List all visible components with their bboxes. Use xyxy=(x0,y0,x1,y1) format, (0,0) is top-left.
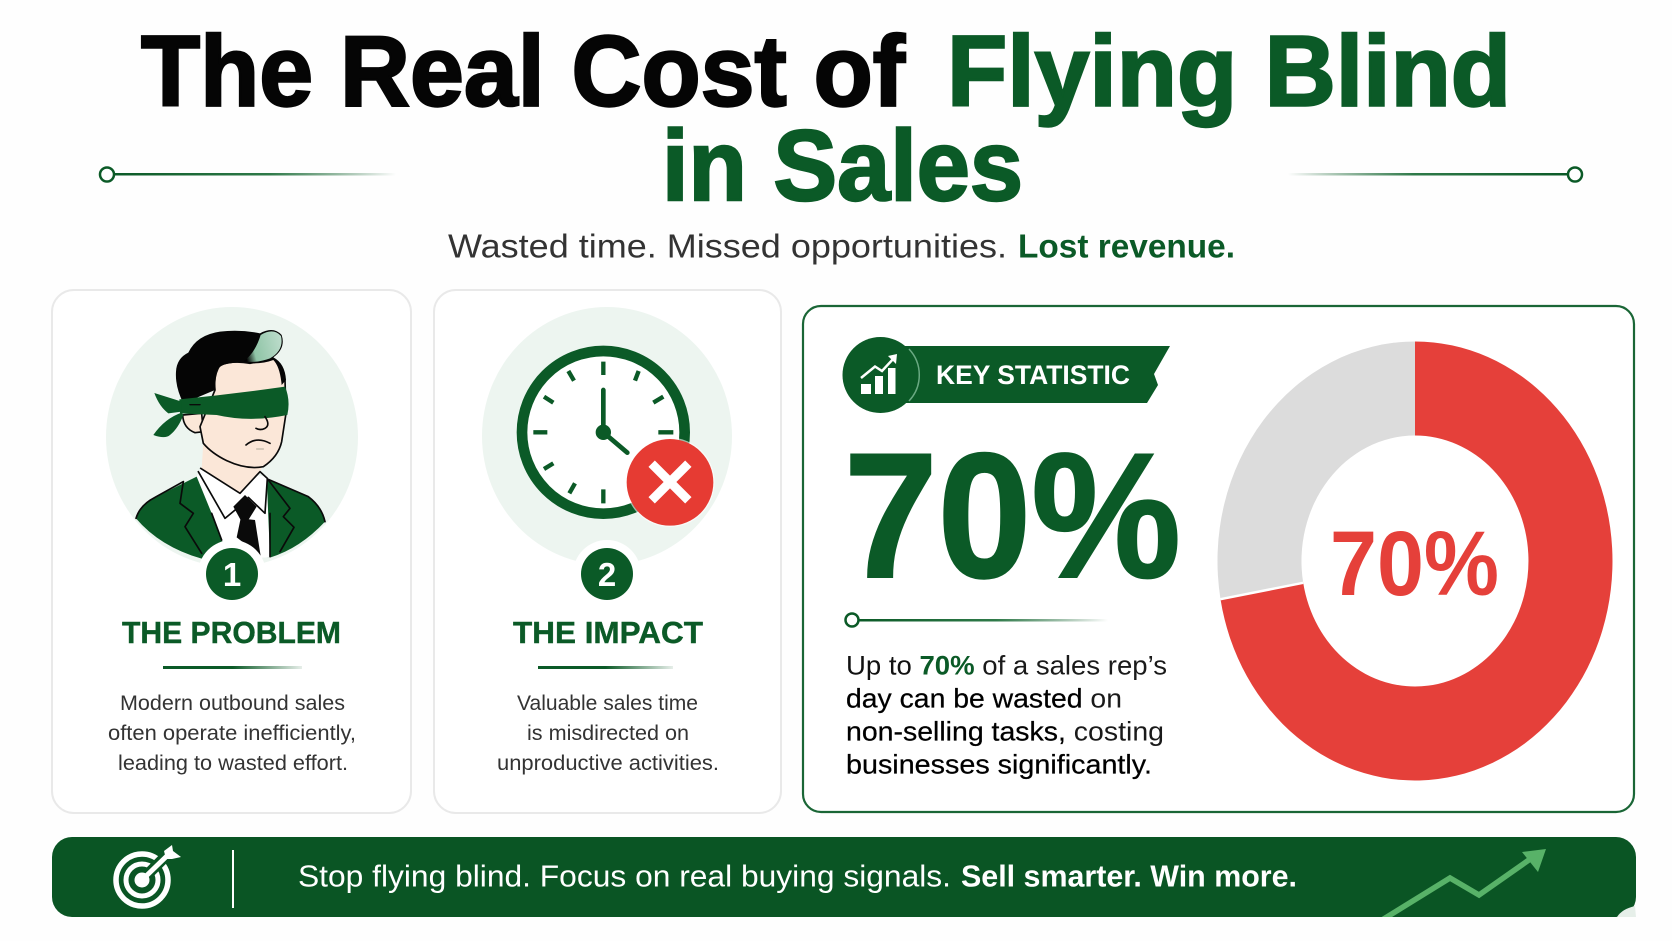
banner text: Stop flying blind. Focus on real buying signals. xyxy=(298,858,951,894)
statistic description xyxy=(846,650,1167,780)
donut chart: 70% xyxy=(1330,513,1499,615)
subtitle xyxy=(448,228,1235,264)
banner text xyxy=(298,858,1297,894)
problem description: often operate inefficiently, xyxy=(108,722,356,745)
donut chart xyxy=(1217,342,1612,780)
number badge 2: 2 xyxy=(598,556,616,593)
impact description: is misdirected on xyxy=(527,722,689,745)
subtitle: Wasted time. Missed opportunities. xyxy=(448,228,1007,264)
title: The Real Cost of xyxy=(141,16,906,128)
corner highlight artifact xyxy=(1617,906,1636,917)
key statistic ribbon: KEY STATISTIC xyxy=(936,360,1130,390)
left title ornament xyxy=(100,168,396,182)
statistic description: businesses significantly. xyxy=(846,750,1152,780)
title xyxy=(141,16,1511,222)
impact description xyxy=(497,692,719,775)
statistic description: day can be wasted on xyxy=(846,684,1122,714)
problem description xyxy=(108,692,356,775)
panel: key statistic xyxy=(803,306,1634,812)
heading divider xyxy=(538,666,673,669)
big 70 percent: 70% xyxy=(844,416,1181,615)
statistic divider xyxy=(846,614,1108,626)
title: Flying Blind xyxy=(947,16,1511,128)
icon: growth chart xyxy=(861,354,897,394)
icon: rising trend arrow xyxy=(1382,849,1546,920)
problem description: Modern outbound sales xyxy=(120,692,345,715)
heading: the impact: THE IMPACT xyxy=(513,615,703,650)
panel: the problem xyxy=(52,290,411,813)
subtitle: Lost revenue. xyxy=(1018,228,1235,264)
banner: call to action xyxy=(52,837,1636,920)
icon: target with arrow xyxy=(116,845,181,906)
heading: the problem: THE PROBLEM xyxy=(122,615,341,650)
title: in Sales xyxy=(662,110,1023,222)
panel: the impact xyxy=(434,290,781,813)
number badge 1: 1 xyxy=(223,556,241,593)
statistic description: Up to 70% of a sales rep’s xyxy=(846,650,1167,680)
right title ornament xyxy=(1288,168,1582,182)
problem description: leading to wasted effort. xyxy=(118,752,348,775)
number badge 2 xyxy=(573,540,641,608)
icon: blindfolded man xyxy=(106,307,358,567)
banner text: Sell smarter. Win more. xyxy=(961,858,1297,894)
statistic description: non-selling tasks, costing xyxy=(846,716,1164,746)
key statistic ribbon xyxy=(842,337,1170,413)
heading divider xyxy=(163,666,302,669)
icon: clock with red cross xyxy=(482,307,732,565)
banner divider xyxy=(232,850,234,908)
number badge 1 xyxy=(198,540,266,608)
impact description: unproductive activities. xyxy=(497,752,719,775)
impact description: Valuable sales time xyxy=(517,692,698,715)
